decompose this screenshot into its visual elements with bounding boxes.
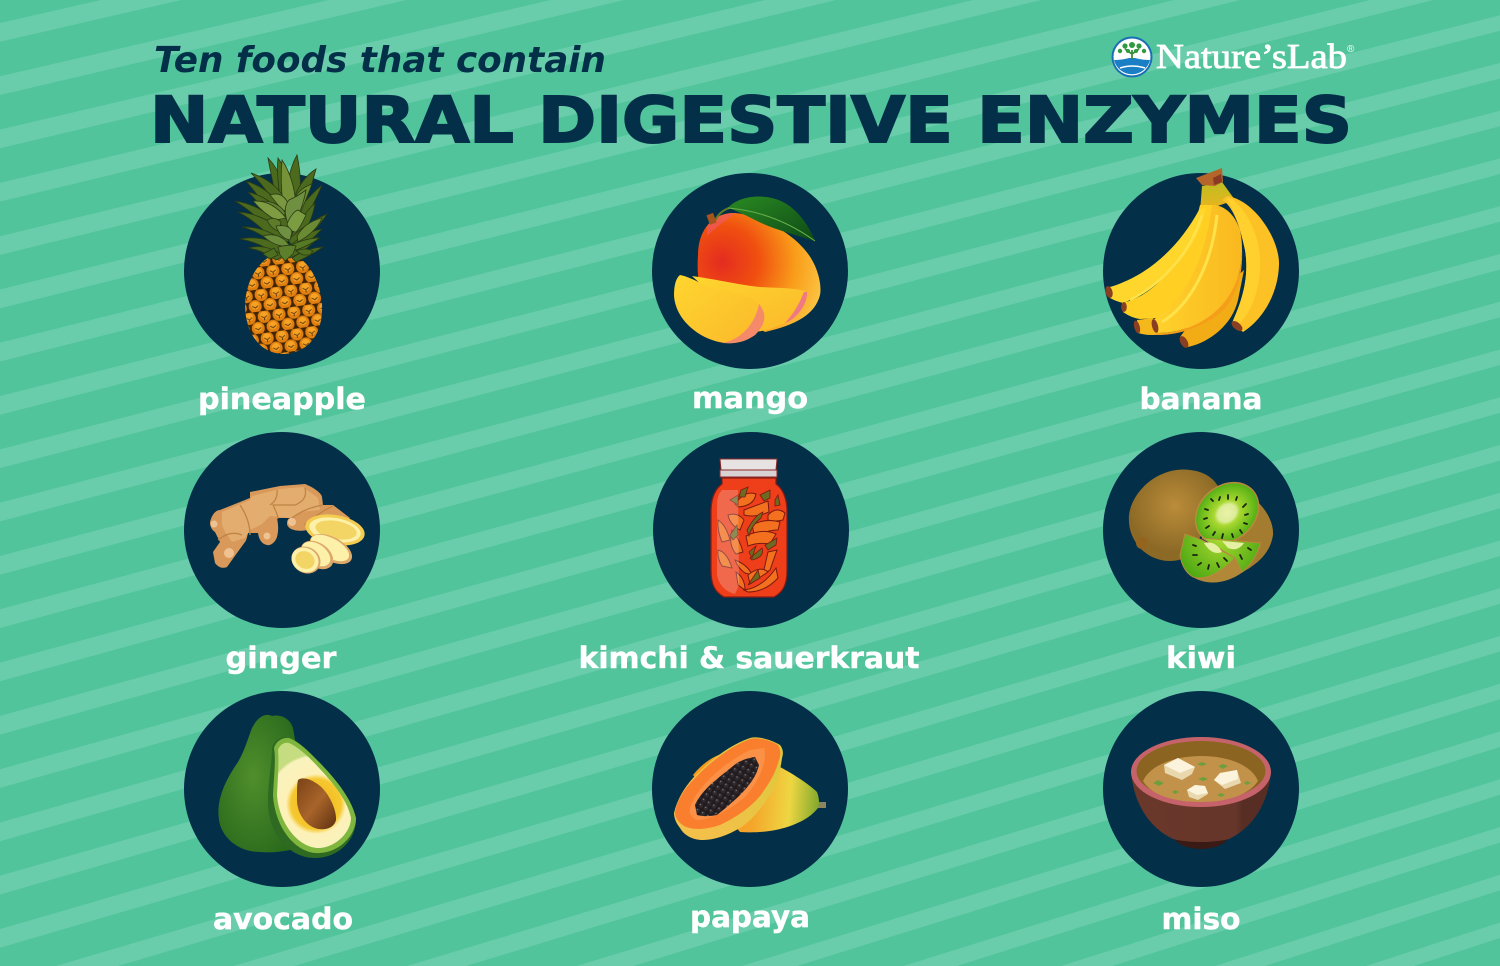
icon: banana [1104, 168, 1279, 349]
label: miso [1162, 902, 1240, 936]
icon: papaya [674, 737, 826, 840]
circle [184, 691, 380, 887]
circle [184, 173, 380, 369]
label: pineapple [198, 382, 366, 416]
circle [1103, 173, 1299, 369]
banana item [1103, 168, 1299, 416]
papaya item [652, 691, 848, 934]
label: banana [1140, 382, 1262, 416]
icon: ginger [210, 484, 367, 579]
icon: pineapple [235, 155, 327, 354]
icon: mango [674, 197, 820, 343]
label: ginger [226, 641, 337, 675]
logo wordmark: Nature’sLab [1156, 37, 1347, 76]
label: kiwi [1166, 641, 1236, 675]
kiwi item [1103, 432, 1299, 675]
icon: miso bowl [1131, 737, 1271, 849]
subtitle: Ten foods that contain [154, 40, 606, 81]
circle [184, 432, 380, 628]
circle [1103, 691, 1299, 887]
icon: kimchi jar [711, 459, 787, 597]
registered mark: ® [1347, 44, 1355, 55]
label: avocado [213, 902, 353, 936]
logo icon [1112, 36, 1152, 78]
label: kimchi & sauerkraut [578, 641, 920, 675]
label: papaya [690, 900, 810, 934]
title: NATURAL DIGESTIVE ENZYMES [150, 84, 1352, 157]
circle [652, 173, 848, 369]
pineapple item [184, 155, 380, 416]
kimchi item [578, 432, 920, 675]
miso item [1103, 691, 1299, 936]
circle [652, 691, 848, 887]
mango item [652, 173, 848, 415]
label: mango [692, 381, 808, 415]
icon: avocado [218, 715, 356, 858]
icon: kiwi [1129, 469, 1273, 582]
circle [653, 432, 849, 628]
avocado item [184, 691, 380, 936]
circle [1103, 432, 1299, 628]
logo [1112, 36, 1355, 78]
ginger item [184, 432, 380, 675]
